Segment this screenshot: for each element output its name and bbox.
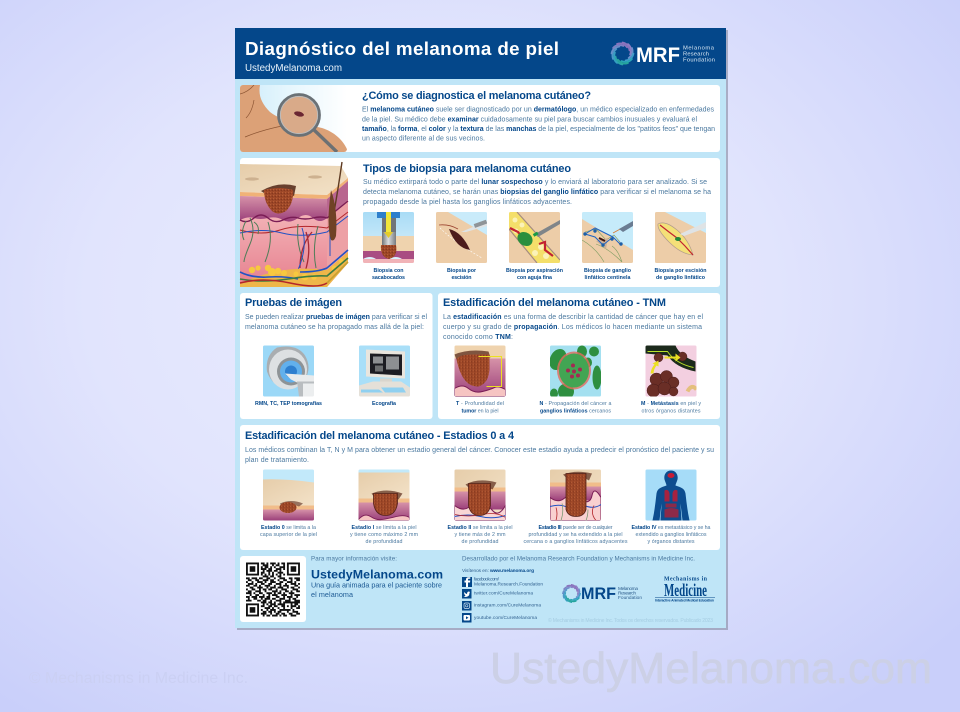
caption: biopsy labels: linfático centinela [584, 275, 631, 281]
logo: Mechanisms in Medicine [655, 576, 715, 602]
panel: biopsy types [240, 158, 720, 287]
caption: imaging labels [255, 401, 396, 407]
logo: Mechanisms in Medicine: Medicine [664, 580, 707, 600]
thumbnail: M metastasis [646, 346, 696, 397]
caption: biopsy labels: Biopsia con [374, 268, 404, 274]
caption: TNM labels: N - Propagación del cáncer a [540, 401, 612, 407]
thumbnail: N lymph nodes [550, 346, 601, 396]
body text: tamaño, la forma, el color y la textura de las manchas de la piel, especialmente de los "patitos feos" que tengan [362, 126, 715, 133]
logo: MRF footer: MRF [581, 584, 616, 603]
header band [235, 28, 726, 79]
body text [245, 314, 427, 331]
caption: TNM labels: ganglios linfáticos cercanos [540, 408, 611, 414]
caption: stage labels: Estadio IV es metastásico y se ha [632, 525, 711, 531]
social links: facebook.com/ [474, 576, 500, 582]
panel: stages 0 to 4 [240, 425, 720, 550]
watermark: copyright: © Mechanisms in Medicine Inc. [29, 670, 248, 687]
social links: youtube.com/CureMelanoma [474, 615, 537, 621]
logo: MRF footer: Research [618, 590, 636, 596]
thumbnail: excision biopsy [436, 212, 487, 263]
visit text: Para mayor información visite: [311, 556, 397, 562]
caption: TNM labels [456, 401, 701, 414]
logo: MRF: Melanoma [683, 46, 715, 52]
caption: stage labels: y tiene como máximo 2 mm [350, 532, 419, 538]
caption: stage labels [260, 525, 711, 545]
visit text: UstedyMelanoma.com [311, 568, 443, 582]
caption: stage labels: Estadio II se limita a la piel [448, 525, 512, 531]
website subtitle: UstedyMelanoma.com [245, 63, 342, 74]
caption: stage labels: Estadio 0 se limita a la [261, 525, 316, 531]
caption: imaging labels: Ecografía [372, 401, 396, 407]
caption: biopsy labels: escisión [452, 275, 472, 281]
caption: stage labels: cercana o a ganglios linfáticos adyacentes [524, 539, 628, 545]
thumbnail: stage II [454, 470, 506, 520]
thumbnail: ultrasound monitor [359, 346, 410, 396]
body text [443, 314, 703, 341]
caption: biopsy labels: Biopsia por aspiración [506, 268, 563, 274]
panel: imaging tests [240, 293, 432, 419]
icon: instagram [462, 601, 472, 610]
caption: stage labels: profundidad y se ha extendido a la piel [528, 532, 622, 538]
logo: MRF footer: Foundation [618, 595, 642, 601]
caption: stage labels: y tiene más de 2 mm [454, 532, 506, 538]
caption: biopsy labels: Biopsia por [447, 268, 476, 274]
body text: detecta melanoma cutáneo, se harán unas biopsias del ganglio linfático para verificar si el melanoma se ha [363, 189, 711, 196]
body text: de la piel. Su médico debe examinar cuidadosamente su piel para buscar cambios inusuales y evaluará el [362, 116, 697, 124]
QR code [240, 556, 306, 622]
thumbnail: lymph node excision [655, 212, 706, 263]
caption: stage labels: de profundidad [462, 539, 499, 545]
body text: Se pueden realizar pruebas de imágen para verificar si el [245, 314, 427, 321]
caption: TNM labels: T - Profundidad del [456, 401, 504, 407]
logo: MRF: Foundation [683, 58, 715, 64]
caption: TNM labels: M - Metástasis en piel y [641, 401, 701, 407]
body text [245, 447, 714, 464]
body text: La estadificación es una forma de describir la cantidad de cáncer que hay en el [443, 314, 703, 321]
logo: MRF [609, 40, 715, 67]
social links [462, 568, 543, 622]
visit text: Una guía animada para el paciente sobre [311, 581, 442, 590]
visit text [311, 556, 443, 599]
panel: TNM staging [438, 293, 720, 419]
heading: ¿Cómo se diagnostica el melanoma cutáneo? [362, 90, 591, 102]
copyright: © Mechanisms in Medicine Inc. Todos os derechos reservados. Publicado 2023 [548, 617, 713, 624]
caption: biopsy labels: sacabocados [372, 275, 405, 281]
caption: TNM labels: otros órganos distantes [642, 408, 701, 414]
caption: biopsy labels: de ganglio linfático [656, 275, 706, 281]
social links: twitter.com/CureMelanoma [474, 591, 533, 597]
body text: propagado desde la piel hasta los ganglios linfáticos adyacentes. [363, 199, 572, 206]
logo: MRF: Research [683, 52, 709, 58]
watermark: website: UstedyMelanoma.com [490, 644, 932, 693]
heading: Estadificación del melanoma cutáneo - TNM [443, 297, 666, 309]
heading: Estadificación del melanoma cutáneo - Estadios 0 a 4 [245, 430, 514, 442]
poster [235, 28, 728, 630]
caption: biopsy labels: Biopsia de ganglio [584, 268, 632, 274]
logo: MRF footer [561, 583, 642, 604]
social links: instagram.com/CureMelanoma [474, 603, 541, 609]
thumbnail: sentinel node biopsy [582, 212, 633, 263]
body text [363, 179, 711, 206]
illustration: skin cross-section [240, 162, 348, 287]
thumbnail: stage 0 [263, 470, 314, 520]
caption: stage labels: y órganos distantes [648, 539, 695, 545]
panel: how melanoma is diagnosed [240, 85, 720, 152]
caption: stage labels: Estadio I se limita a la piel [352, 525, 416, 531]
body text: conocido como TNM: [443, 334, 513, 341]
thumbnail: stage I [358, 470, 410, 520]
social links: Visítenos en: www.melanoma.org [462, 568, 534, 574]
developed by: Desarrollado por el Melanoma Research Foundation y Mechanisms in Medicine Inc. [462, 556, 695, 562]
footer [240, 556, 715, 624]
caption: stage labels: Estadio III puede ser de cualquier [538, 525, 613, 531]
logo: MRF footer: Melanoma [618, 586, 638, 592]
logo: MRF: MRF [636, 44, 680, 67]
caption: biopsy labels: con aguja fina [517, 275, 552, 281]
body text [362, 106, 715, 142]
thumbnail: MRI scanner [263, 346, 314, 396]
body text: Su médico extirpará todo o parte del lunar sospechoso y lo enviará al laboratorio para ser analizado. Si se [363, 179, 707, 186]
body text: cuerpo y su grado de propagación. Los médicos lo hacen mediante un sistema [443, 324, 702, 331]
thumbnail: punch biopsy [363, 212, 414, 263]
caption: stage labels: de profundidad [366, 539, 403, 545]
body text: El melanoma cutáneo suele ser diagnosticado por un dermatólogo, un médico especializado en enfermedades [362, 106, 714, 114]
caption: stage labels: capa superior de la piel [260, 532, 317, 538]
body text: plan de tratamiento. [245, 457, 309, 464]
illustration: shoulder and magnifying glass [240, 85, 348, 152]
thumbnail: stage IV body [646, 470, 696, 520]
logo: Mechanisms in Medicine: Mechanisms in [664, 576, 708, 582]
title: Diagnóstico del melanoma de piel [245, 38, 559, 59]
body text: Los médicos combinan la T, N y M para obtener un estadio general del cáncer. Conocer este estadio ayuda a predecir el pronóstico del paciente y su [245, 447, 714, 454]
icon: facebook [462, 577, 472, 587]
visit text: el melanoma [311, 590, 353, 599]
body text: melanoma cutáneo se ha propagado mas allá de la piel: [245, 324, 424, 331]
caption: stage labels: extendido a ganglios linfáticos [636, 532, 707, 538]
thumbnail: fine needle aspiration [509, 212, 560, 263]
thumbnail: T tumour depth [454, 346, 506, 396]
icon: twitter [462, 589, 472, 598]
social links: Melanoma.Research.Foundation [474, 582, 543, 588]
icon: youtube [462, 613, 472, 622]
heading: Tipos de biopsia para melanoma cutáneo [363, 163, 571, 175]
caption: biopsy labels: Biopsia por escisión [654, 268, 706, 274]
body text: un aspecto diferente al de sus vecinos. [362, 136, 485, 142]
caption: TNM labels: tumor en la piel [462, 408, 498, 414]
thumbnail: stage III [550, 470, 601, 520]
heading: Pruebas de imágen [245, 297, 342, 309]
caption: biopsy labels [372, 268, 706, 281]
caption: imaging labels: RMN, TC, TEP tomografías [255, 401, 322, 407]
logo: Mechanisms in Medicine: Interactive Animated Medical Education [655, 598, 714, 602]
